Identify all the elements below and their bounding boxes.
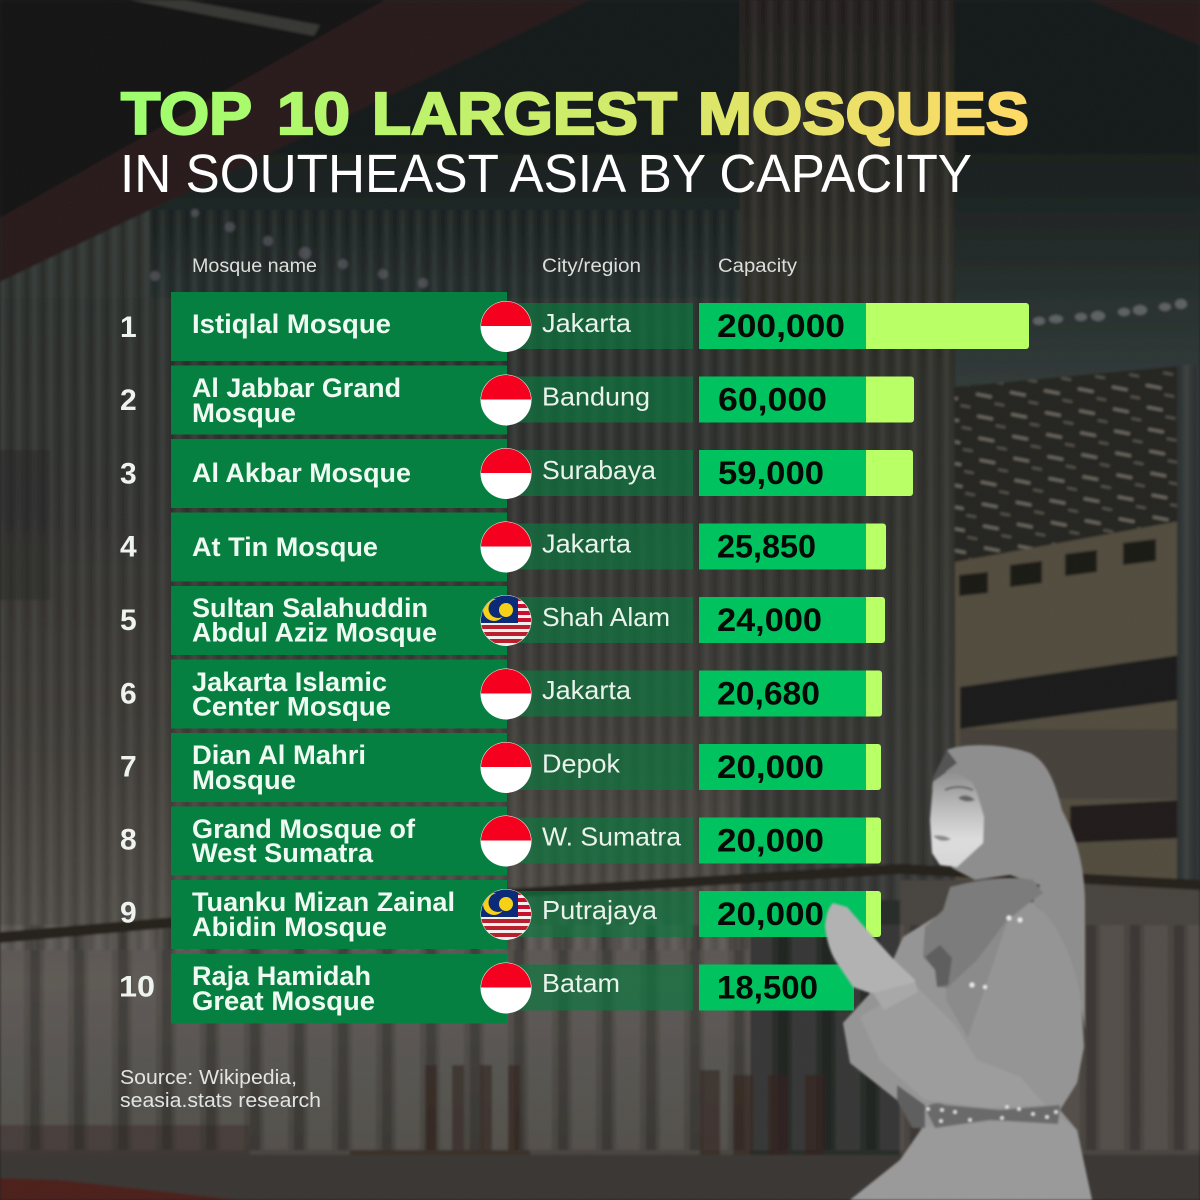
- source note: [120, 1067, 321, 1112]
- row 7: Dian Al Mahri Mosque: 20,000: [717, 749, 824, 785]
- row 8: Grand Mosque of West Sumatra: Grand Mosque of: [192, 814, 416, 844]
- row 1: Istiqlal Mosque: 200,000: [717, 308, 845, 344]
- row 5: Sultan Salahuddin Abdul Aziz Mosque: Abdul Aziz Mosque: [192, 618, 437, 648]
- row 9: Tuanku Mizan Zainal Abidin Mosque: Abidin Mosque: [192, 912, 387, 942]
- row 10: Raja Hamidah Great Mosque: Great Mosque: [192, 986, 375, 1016]
- row 4: At Tin Mosque: [120, 512, 886, 582]
- row 2: Al Jabbar Grand Mosque: Al Jabbar Grand: [192, 373, 401, 403]
- row 4: At Tin Mosque: Jakarta: [542, 528, 632, 558]
- row 9: Tuanku Mizan Zainal Abidin Mosque: Putrajaya: [542, 895, 658, 925]
- row 5: Sultan Salahuddin Abdul Aziz Mosque: Sultan Salahuddin: [192, 593, 428, 623]
- row 8: Grand Mosque of West Sumatra: West Sumatra: [192, 838, 374, 868]
- row 10: Raja Hamidah Great Mosque: [119, 954, 854, 1024]
- row 8: Grand Mosque of West Sumatra: [120, 806, 881, 876]
- row 8: Grand Mosque of West Sumatra: 20,000: [717, 822, 824, 858]
- row 5: Sultan Salahuddin Abdul Aziz Mosque: 5: [120, 604, 137, 637]
- row 3: Al Akbar Mosque: Surabaya: [542, 455, 657, 485]
- row 6: Jakarta Islamic Center Mosque: 20,680: [717, 676, 820, 712]
- source note: seasia.stats research: [120, 1090, 321, 1112]
- row 7: Dian Al Mahri Mosque: Depok: [542, 748, 621, 778]
- title line 1: MOSQUES: [698, 81, 1029, 147]
- row 6: Jakarta Islamic Center Mosque: Center Mosque: [192, 692, 391, 722]
- row 10: Raja Hamidah Great Mosque: 10: [119, 970, 155, 1004]
- row 8: Grand Mosque of West Sumatra: W. Sumatra: [542, 822, 682, 852]
- row 3: Al Akbar Mosque: Al Akbar Mosque: [192, 458, 411, 488]
- row 3: Al Akbar Mosque: [120, 439, 913, 508]
- row 2: Al Jabbar Grand Mosque: 2: [120, 384, 137, 417]
- row 1: Istiqlal Mosque: Istiqlal Mosque: [192, 309, 391, 339]
- row 4: At Tin Mosque: 4: [120, 530, 137, 564]
- row 4: At Tin Mosque: 25,850: [717, 528, 816, 564]
- row 3: Al Akbar Mosque: 3: [120, 458, 137, 490]
- row 10: Raja Hamidah Great Mosque: Raja Hamidah: [192, 961, 371, 991]
- title line 1: 10: [277, 81, 350, 147]
- row 5: Sultan Salahuddin Abdul Aziz Mosque: [120, 586, 885, 655]
- row 6: Jakarta Islamic Center Mosque: Jakarta Islamic: [192, 667, 387, 697]
- row 7: Dian Al Mahri Mosque: Dian Al Mahri: [192, 740, 366, 770]
- title: [120, 81, 1029, 204]
- row 7: Dian Al Mahri Mosque: Mosque: [192, 765, 296, 795]
- row 3: Al Akbar Mosque: 59,000: [718, 455, 824, 491]
- row 4: At Tin Mosque: At Tin Mosque: [192, 532, 378, 562]
- row 2: Al Jabbar Grand Mosque: Bandung: [542, 382, 650, 412]
- row 9: Tuanku Mizan Zainal Abidin Mosque: [120, 880, 881, 949]
- woman praying, greyscale figure: [825, 745, 1092, 1200]
- row 9: Tuanku Mizan Zainal Abidin Mosque: 20,000: [717, 896, 824, 932]
- row 7: Dian Al Mahri Mosque: [120, 733, 881, 802]
- header: city: City/region: [542, 256, 641, 277]
- row 1: Istiqlal Mosque: Jakarta: [542, 308, 632, 338]
- title line 1: LARGEST: [372, 81, 677, 147]
- source note: Source: Wikipedia,: [120, 1067, 297, 1089]
- row 6: Jakarta Islamic Center Mosque: [120, 660, 882, 728]
- row 9: Tuanku Mizan Zainal Abidin Mosque: 9: [120, 896, 137, 930]
- row 8: Grand Mosque of West Sumatra: 8: [120, 824, 137, 856]
- row 10: Raja Hamidah Great Mosque: 18,500: [717, 970, 818, 1006]
- row 5: Sultan Salahuddin Abdul Aziz Mosque: Shah Alam: [542, 602, 670, 632]
- row 10: Raja Hamidah Great Mosque: Batam: [542, 968, 620, 998]
- header: capacity: Capacity: [718, 256, 798, 277]
- row 6: Jakarta Islamic Center Mosque: Jakarta: [542, 675, 632, 705]
- row 1: Istiqlal Mosque: [120, 292, 1029, 361]
- title line 1: [121, 81, 1029, 147]
- row 5: Sultan Salahuddin Abdul Aziz Mosque: 24,000: [717, 602, 822, 638]
- row 2: Al Jabbar Grand Mosque: 60,000: [718, 382, 827, 418]
- row 2: Al Jabbar Grand Mosque: Mosque: [192, 398, 296, 428]
- row 6: Jakarta Islamic Center Mosque: 6: [120, 678, 137, 710]
- row 7: Dian Al Mahri Mosque: 7: [120, 750, 137, 784]
- header: mosque name: Mosque name: [192, 256, 317, 277]
- table column headers: [192, 256, 798, 277]
- title line 2: IN SOUTHEAST ASIA BY CAPACITY: [120, 144, 972, 204]
- row 2: Al Jabbar Grand Mosque: [120, 366, 914, 434]
- title line 1: TOP: [121, 81, 252, 147]
- row 1: Istiqlal Mosque: 1: [120, 311, 137, 344]
- row 9: Tuanku Mizan Zainal Abidin Mosque: Tuanku Mizan Zainal: [192, 887, 455, 917]
